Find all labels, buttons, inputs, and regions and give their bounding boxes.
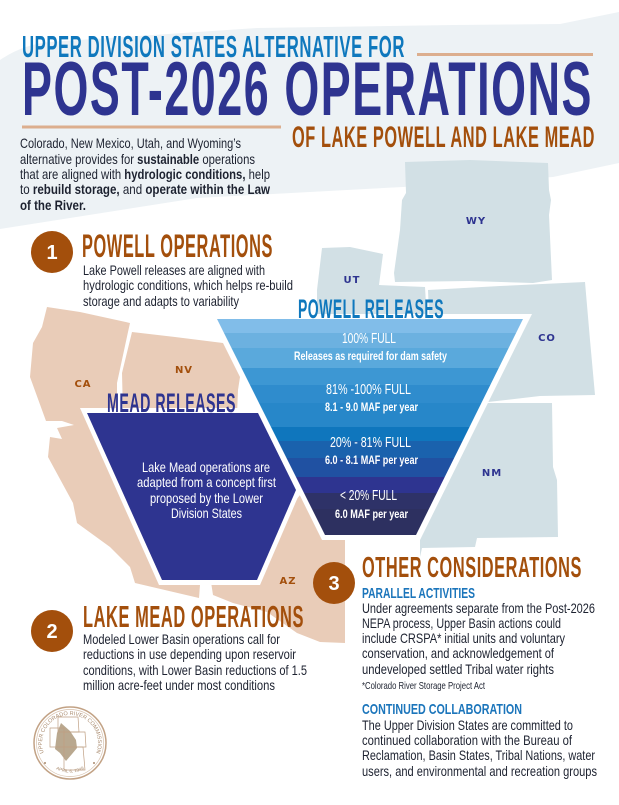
- intro paragraph: alternative provides for sustainable operations: [20, 151, 255, 167]
- funnel chart: Powell releases: [210, 314, 532, 540]
- tier: under 20% full: 6.0 MAF per year: [335, 507, 408, 521]
- background brush wash: [0, 12, 619, 229]
- body text: conditions, with Lower Basin reductions of 1.5: [83, 662, 307, 678]
- tier: 20% to 81% full: 20% - 81% FULL: [330, 434, 411, 451]
- intro paragraph: that are aligned with hydrologic conditions, help: [20, 166, 270, 182]
- state: Arizona: [211, 495, 345, 643]
- label: AZ: AZ: [280, 576, 296, 587]
- heading: Powell Operations: POWELL OPERATIONS: [82, 228, 273, 264]
- heading: Lake Mead Operations: LAKE MEAD OPERATIONS: [83, 599, 304, 634]
- intro paragraph: [20, 135, 270, 213]
- tier: 81% to 100% full: 81% -100% FULL: [326, 381, 411, 398]
- seal: Upper Colorado River Commission: APRIL 6, 1949: [56, 766, 84, 773]
- panel text: adapted from a concept first: [137, 474, 276, 490]
- state: Colorado: [428, 282, 595, 402]
- tier: under 20% full: [335, 487, 408, 521]
- panel text: proposed by the Lower: [150, 490, 263, 506]
- label: NM: NM: [482, 468, 502, 479]
- section 2: Lake Mead operations: [31, 599, 307, 693]
- number badge 1: [31, 231, 73, 273]
- state: California: [30, 307, 200, 598]
- panel text: [137, 459, 276, 521]
- panel text: Division States: [171, 505, 242, 521]
- footnote: *Colorado River Storage Project Act: [362, 680, 485, 692]
- body text: continued collaboration: [362, 717, 597, 779]
- body text: storage and adapts to variability: [83, 293, 239, 309]
- state labels: [74, 216, 556, 587]
- body text: parallel activities: include CRSPA* initial units and voluntary: [362, 630, 565, 646]
- body text: parallel activities: undeveloped settled Tribal water rights: [362, 661, 554, 677]
- body text: hydrologic conditions, which helps re-build: [83, 277, 293, 293]
- tier: under 20% full: < 20% FULL: [340, 487, 397, 504]
- state: Wyoming: [394, 160, 552, 283]
- tier: 81% to 100% full: 8.1 - 9.0 MAF per year: [325, 400, 418, 414]
- seal: Upper Colorado River Commission: [33, 706, 107, 780]
- label: CO: CO: [538, 333, 556, 344]
- number badge 1: 1: [46, 242, 58, 264]
- body text: parallel activities: conservation, and acknowledgement of: [362, 645, 554, 661]
- title block: [22, 29, 595, 154]
- map: upper division states: [317, 160, 595, 557]
- tier: 100% full: [294, 330, 447, 363]
- section 3: Other considerations: [313, 552, 597, 779]
- section 1: Powell operations: [31, 228, 293, 309]
- body text: continued collaboration: continued collaboration with the Bureau of: [362, 732, 572, 748]
- subheading: Continued Collaboration: CONTINUED COLLABORATION: [362, 701, 522, 718]
- state: Nevada: [122, 332, 240, 415]
- state: New Mexico: [420, 403, 558, 557]
- body text: [83, 631, 307, 693]
- subheading: Parallel Activities: PARALLEL ACTIVITIES: [362, 585, 475, 602]
- number badge 2: 2: [46, 621, 58, 643]
- tier: 20% to 81% full: 6.0 - 8.1 MAF per year: [325, 453, 418, 467]
- intro paragraph: Colorado, New Mexico, Utah, and Wyoming’s: [20, 135, 241, 151]
- label: UT: UT: [344, 275, 360, 286]
- seal: Upper Colorado River Commission: UPPER COLORADO RIVER COMMISSION: [38, 711, 102, 754]
- tier: 81% to 100% full: [325, 381, 418, 414]
- intro paragraph: of the River.: [20, 197, 86, 213]
- body text: Lake Powell releases are aligned with: [83, 262, 265, 278]
- number badge 3: 3: [328, 573, 340, 595]
- label: NV: NV: [175, 365, 193, 376]
- label: WY: WY: [466, 216, 486, 227]
- body text: Modeled Lower Basin operations call for: [83, 631, 280, 647]
- tier: 100% full: 100% FULL: [342, 330, 396, 347]
- hexagon panel: Mead releases: [80, 388, 301, 585]
- body text: [83, 262, 293, 309]
- number badge 2: [31, 610, 73, 652]
- body text: parallel activities: NEPA process, Upper Basin actions could: [362, 615, 561, 631]
- heading: Mead Releases: MEAD RELEASES: [107, 388, 236, 418]
- tier: 20% to 81% full: [325, 434, 418, 467]
- panel text: Lake Mead operations are: [142, 459, 270, 475]
- funnel heading: Powell Releases: POWELL RELEASES: [298, 294, 444, 324]
- body text: parallel activities: [362, 600, 595, 677]
- number badge 3: [313, 562, 355, 604]
- body text: reductions in use depending upon reservoir: [83, 646, 296, 662]
- state: Utah: [317, 247, 427, 320]
- label: CA: CA: [74, 379, 92, 390]
- map: lower division states: [30, 307, 345, 643]
- tier: 100% full: Releases as required for dam safety: [294, 349, 447, 363]
- intro paragraph: to rebuild storage, and operate within the Law: [20, 181, 270, 197]
- body text: million acre-feet under most conditions: [83, 677, 275, 693]
